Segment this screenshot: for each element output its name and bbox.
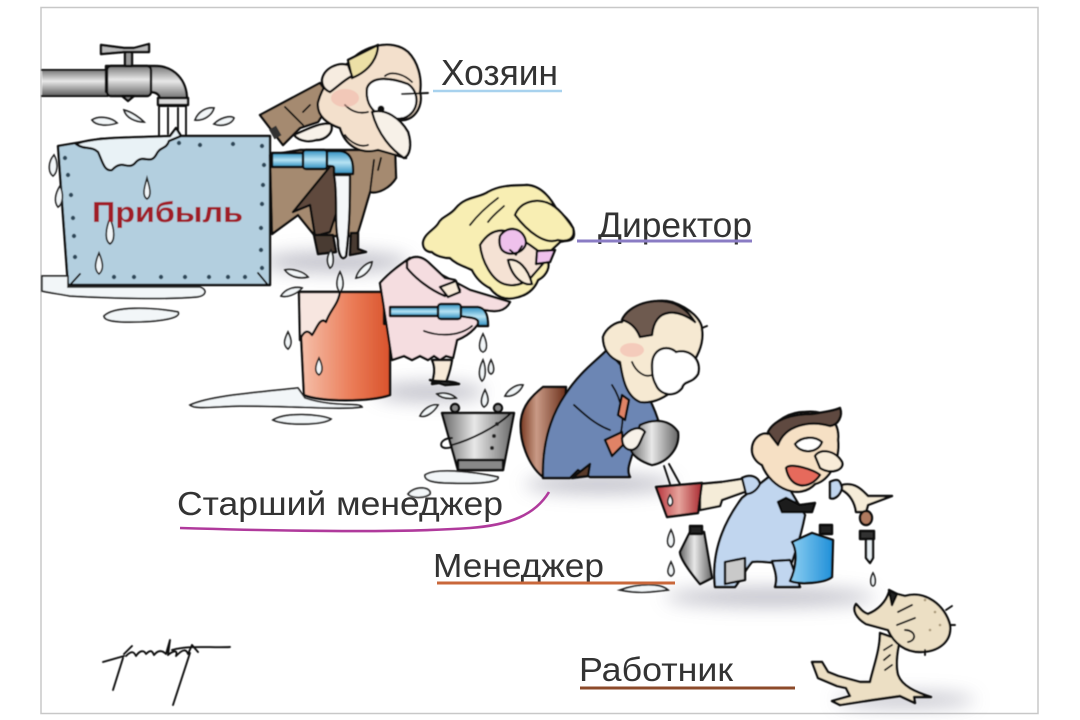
grey flask — [680, 532, 712, 584]
label: worker: Работник — [579, 651, 734, 688]
spilled water under tank — [42, 276, 205, 322]
drops near manager — [620, 530, 875, 592]
face — [480, 231, 548, 285]
figure: manager — [656, 408, 892, 587]
hand — [294, 124, 332, 141]
spilled water under pot — [190, 388, 362, 424]
dress — [380, 258, 510, 360]
ground shadows — [260, 252, 975, 707]
legs — [432, 360, 452, 384]
figure: owner — [260, 45, 428, 268]
heading: profit label: Прибыль — [92, 197, 243, 229]
label: director: Директор — [598, 206, 752, 245]
figure: senior manager — [543, 301, 707, 478]
body — [714, 476, 805, 587]
arm — [700, 478, 750, 510]
sleeve — [260, 83, 332, 145]
ear — [322, 64, 352, 92]
stream into cup — [664, 464, 680, 484]
coat lower — [270, 150, 396, 236]
water stream — [334, 175, 350, 258]
blue tap — [272, 153, 306, 167]
signature — [103, 640, 230, 705]
legs and torso — [812, 633, 931, 705]
label: senior manager: Старший менеджер — [177, 485, 503, 522]
label: senior manager — [177, 485, 549, 531]
water stream — [159, 106, 186, 137]
cup — [656, 483, 702, 517]
head — [752, 412, 838, 492]
trousers — [293, 163, 352, 236]
big nose — [367, 79, 417, 119]
faucet: main pipe — [42, 44, 188, 137]
drops on tank — [144, 178, 150, 199]
arm — [407, 257, 460, 296]
droop — [372, 111, 410, 158]
reaching arm and dropper — [830, 480, 842, 499]
figure: director — [380, 185, 574, 385]
head — [318, 45, 421, 158]
bow tie — [778, 498, 815, 512]
bucket — [425, 404, 514, 483]
head — [854, 592, 950, 652]
tank — [49, 128, 270, 285]
brown jug — [521, 387, 566, 477]
head — [603, 301, 702, 402]
hand and teapot — [630, 421, 678, 465]
hair — [423, 185, 574, 299]
blue canister — [790, 533, 833, 583]
label: owner: Хозяин — [441, 52, 558, 93]
rivets — [63, 141, 266, 279]
water splashes top — [92, 108, 234, 125]
drops below director — [420, 334, 523, 416]
water splashes mid — [281, 262, 372, 296]
pot — [285, 292, 391, 400]
shoes — [314, 235, 336, 254]
spill under bucket — [408, 488, 430, 497]
label: manager: Менеджер — [433, 547, 604, 584]
blue tap — [390, 307, 440, 316]
figure: worker — [812, 590, 955, 705]
